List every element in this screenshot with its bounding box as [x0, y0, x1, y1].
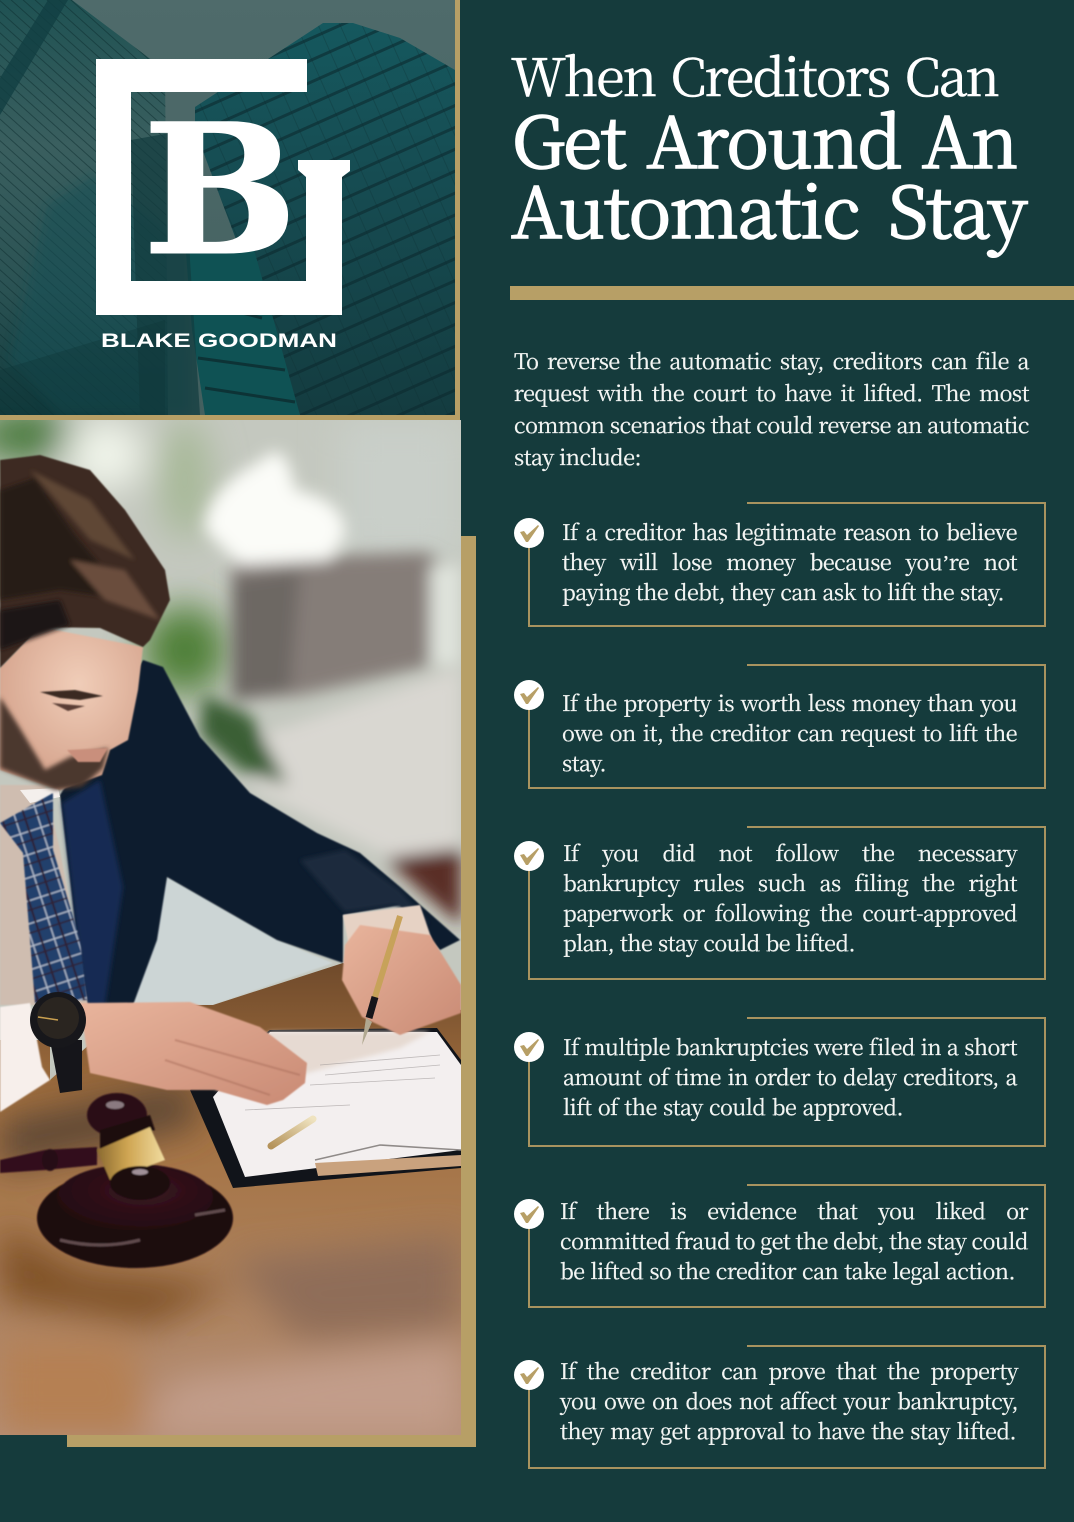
- title line 2: Get Around An: [512, 87, 1017, 189]
- panel: item 3: [514, 826, 1046, 980]
- text: they will lose money because you’re not: [562, 546, 1017, 577]
- blurred background: [0, 420, 461, 1435]
- intro text: request with the court to have it lifted. The most: [514, 377, 1029, 408]
- intro text: common scenarios that could reverse an automatic: [514, 409, 1029, 440]
- right hand and cuff: [343, 905, 432, 952]
- photo: lawyer signing documents with gavel: [0, 420, 461, 1435]
- text: amount of time in order to delay creditors, a: [563, 1061, 1017, 1092]
- panel: item 6: [514, 1345, 1046, 1469]
- panel: item 4: [514, 1017, 1046, 1147]
- text: paying the debt, they can ask to lift the stay.: [562, 576, 1004, 607]
- text: owe on it, the creditor can request to lift the: [562, 717, 1017, 748]
- hair: [0, 455, 170, 668]
- text: [562, 516, 1018, 607]
- text: If the property is worth less money than you: [562, 687, 1017, 718]
- fountain pen: [362, 916, 400, 1045]
- gold divider bar: [510, 286, 1074, 300]
- left hand: [80, 1002, 307, 1105]
- panel: building photo with logo: [0, 0, 460, 420]
- icon: check: [514, 841, 544, 871]
- text: plan, the stay could be lifted.: [563, 927, 855, 958]
- title line 1: When Creditors Can: [511, 36, 998, 111]
- text: bankruptcy rules such as filing the right: [563, 867, 1017, 898]
- paper and clipboard: [190, 1028, 461, 1188]
- panel: item 1: [514, 502, 1046, 627]
- gold frame behind photo: [67, 536, 476, 1447]
- shirt: [0, 785, 88, 1005]
- text: [563, 1031, 1018, 1122]
- text: [560, 1355, 1019, 1446]
- title: [511, 36, 1028, 259]
- text: stay.: [562, 747, 606, 778]
- text: lift of the stay could be approved.: [563, 1091, 903, 1122]
- icon: check: [514, 680, 544, 710]
- gavel: [0, 1093, 233, 1268]
- logo frame: [96, 59, 350, 315]
- text: [563, 837, 1018, 958]
- man's suit: [60, 660, 460, 1005]
- left cuff: [0, 1003, 50, 1112]
- icon: check: [514, 1032, 544, 1062]
- intro text: [514, 345, 1030, 472]
- intro text: To reverse the automatic stay, creditors can file a: [514, 345, 1029, 376]
- watch: [50, 1040, 82, 1093]
- title line 3: Automatic Stay: [511, 157, 1026, 259]
- text: [562, 687, 1017, 778]
- intro text: stay include:: [514, 441, 641, 472]
- wooden table: [0, 963, 461, 1435]
- icon: check: [514, 1360, 544, 1390]
- text: If you did not follow the necessary: [563, 837, 1017, 868]
- light floor area: [133, 877, 333, 1005]
- face: [0, 627, 143, 790]
- pen cap: [271, 1119, 313, 1146]
- panel: item 5: [514, 1184, 1046, 1308]
- text: you owe on does not affect your bankruptcy,: [560, 1385, 1018, 1416]
- text: If a creditor has legitimate reason to believe: [562, 516, 1017, 547]
- logo wordmark: BLAKE GOODMAN: [101, 331, 337, 352]
- text: If the creditor can prove that the property: [560, 1355, 1018, 1386]
- text: [560, 1195, 1028, 1286]
- text: paperwork or following the court-approved: [563, 897, 1017, 928]
- text: be lifted so the creditor can take legal action.: [560, 1255, 1015, 1286]
- text: If multiple bankruptcies were filed in a short: [563, 1031, 1017, 1062]
- text: If there is evidence that you liked or: [560, 1195, 1028, 1226]
- text: they may get approval to have the stay lifted.: [560, 1415, 1016, 1446]
- panel: item 2: [514, 664, 1046, 789]
- text: committed fraud to get the debt, the stay could: [560, 1225, 1028, 1256]
- tie: [0, 793, 87, 1003]
- icon: check: [514, 1199, 544, 1229]
- icon: check: [514, 518, 544, 548]
